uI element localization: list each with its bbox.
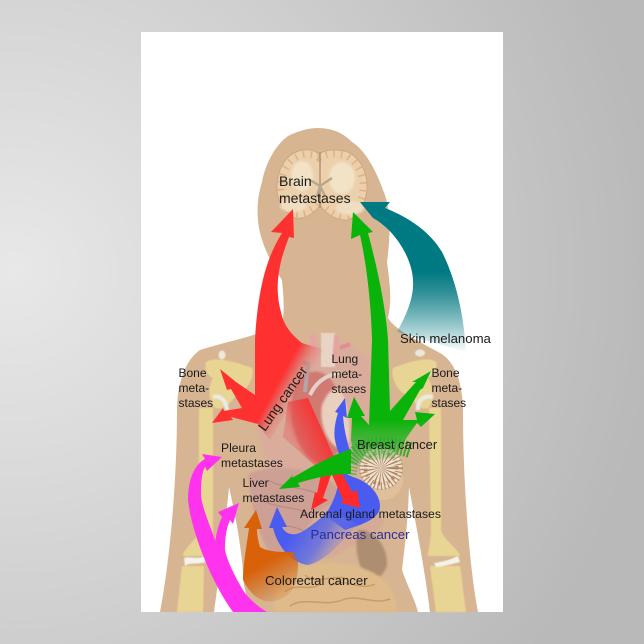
lungs and chest [258, 343, 397, 478]
tumour mass [360, 447, 402, 489]
brain [277, 150, 367, 220]
label: brain metastases [279, 173, 351, 206]
liver [248, 468, 341, 556]
label: bone metastases right [432, 366, 466, 410]
skeleton: arm and shoulder bones [177, 350, 466, 612]
arrow: red to adrenal left [311, 470, 332, 510]
arrow: red to adrenal right [330, 470, 360, 508]
arrow: breast cancer (green) [279, 212, 435, 489]
arrow: magenta to liver [215, 503, 267, 612]
label: adrenal gland metastases: Adrenal gland metastases [300, 507, 441, 521]
label: liver metastases [242, 476, 304, 505]
label: lung metastases: meta- [332, 367, 362, 381]
label: pancreas cancer: Pancreas cancer [310, 527, 410, 542]
heart [291, 372, 343, 464]
white poster sheet [141, 32, 503, 612]
label: colorectal cancer: Colorectal cancer [265, 573, 368, 588]
label: breast cancer: Breast cancer [357, 437, 438, 452]
arrow: colorectal cancer to liver (orange) [243, 510, 298, 602]
arrow: lung cancer (red) [212, 209, 360, 510]
label: brain metastases: Brain [279, 173, 312, 189]
label: bone metastases left [178, 366, 213, 410]
label: pleura metastases: Pleura [221, 441, 256, 455]
label: lung metastases [332, 352, 366, 396]
clavicle ends [218, 350, 226, 360]
shoulder joint arcs [213, 397, 227, 410]
arrow: skin melanoma to brain (teal) [360, 202, 466, 352]
label: lung metastases: stases [332, 382, 366, 396]
label: liver metastases: Liver [242, 476, 269, 490]
label: liver metastases: metastases [242, 491, 304, 505]
label: bone metastases right: Bone [432, 366, 460, 380]
label: bone metastases left: Bone [178, 366, 207, 380]
arrow: magenta to pleura [188, 454, 262, 612]
elbow joint caps [184, 556, 206, 566]
arrow: red to brain and bones [212, 209, 325, 440]
label: bone metastases right: stases [432, 396, 466, 410]
green cancer speckle [350, 445, 410, 462]
label: lung metastases: Lung [332, 352, 358, 366]
trachea [310, 333, 350, 367]
arrow: colorectal cancer to pleura and liver (magenta) [188, 454, 267, 612]
label: skin melanoma: Skin melanoma [400, 331, 492, 346]
label: pleura metastases [221, 441, 283, 470]
stomach [302, 503, 385, 559]
arrow: green to brain, lungs and bones [347, 212, 435, 462]
arrow: pancreas cancer to lung and liver metastases (blue) [269, 398, 380, 565]
label: lung cancer: Lung cancer [255, 363, 311, 434]
label: bone metastases right: meta- [432, 381, 462, 395]
label: bone metastases left: meta- [178, 381, 209, 395]
tumour: breast [349, 445, 410, 500]
label: bone metastases left: stases [178, 396, 213, 410]
body silhouette [160, 128, 478, 612]
label: brain metastases: metastases [279, 190, 351, 206]
arrow: green to liver metastases [279, 449, 351, 489]
red stream to adrenal glands [283, 398, 341, 473]
arrow: blue to liver metastases [269, 507, 360, 565]
intestines [274, 563, 397, 612]
internal organs [248, 333, 397, 612]
label: pleura metastases: metastases [221, 456, 283, 470]
breast mound [363, 460, 403, 500]
spleen [356, 530, 387, 578]
pancreas cancer mass [325, 470, 380, 530]
arrow: blue to lung metastases [334, 398, 350, 464]
